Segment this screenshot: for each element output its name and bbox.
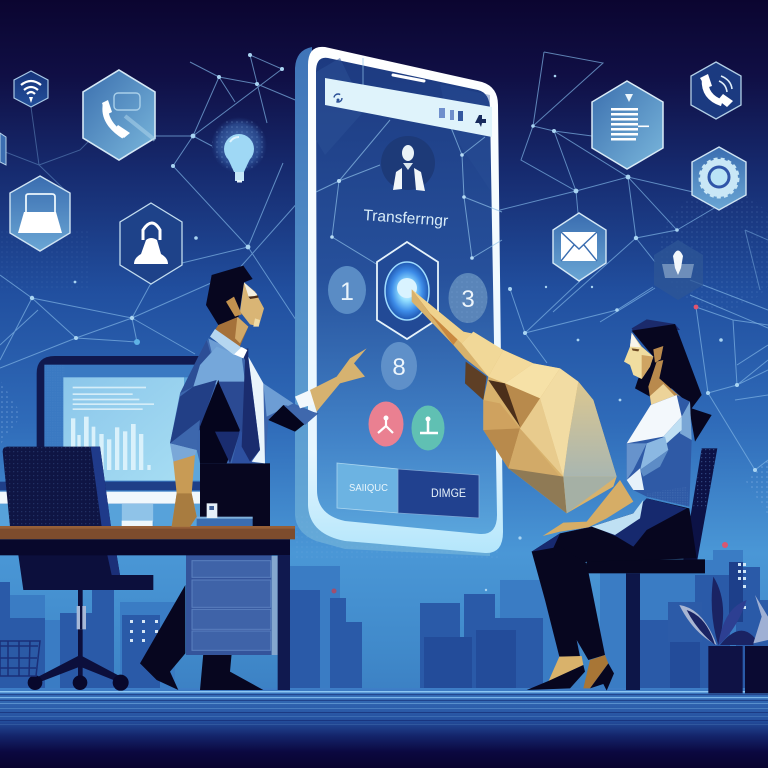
- dotted texture patches: [0, 190, 768, 515]
- bottom button bar: [337, 463, 479, 518]
- woman figure: [412, 289, 712, 691]
- desktop monitor: [0, 356, 201, 527]
- wastebasket: [0, 641, 40, 676]
- number button 8: 8: [392, 354, 406, 381]
- monitor bar chart: [71, 417, 151, 470]
- icon: edge tile: [0, 133, 6, 165]
- number button 1: [328, 266, 366, 314]
- woman lap and thigh: [532, 498, 697, 577]
- number button 8: [381, 342, 417, 390]
- office chair: [3, 447, 153, 691]
- number button 1: 1: [340, 278, 354, 306]
- icon: light bulb: [211, 117, 267, 182]
- icon: document hexagon: [592, 81, 663, 169]
- desk: [0, 526, 295, 690]
- green action button: [412, 406, 444, 450]
- man head and collar: [206, 266, 264, 358]
- status bar: [325, 78, 492, 137]
- man shirt: [170, 338, 317, 463]
- profile avatar: [381, 136, 435, 191]
- woman chair: [587, 448, 717, 690]
- icon: person hexagon: [654, 240, 703, 300]
- phone side edge: [295, 47, 490, 556]
- woman legs: [532, 547, 605, 660]
- woman feet and shoes: [527, 655, 614, 691]
- woman shirt: [627, 395, 692, 508]
- man left arm: [170, 443, 197, 527]
- city skyline: [0, 542, 768, 690]
- phone screen: [316, 58, 497, 534]
- big pointing hand: [412, 289, 617, 513]
- bottom button bar: DIMGE: [431, 486, 466, 500]
- woman neck and face: [624, 333, 680, 408]
- man right arm: [268, 348, 367, 432]
- icon: bag hexagon: [10, 176, 70, 251]
- woman forearm: [543, 480, 633, 536]
- right icons: [553, 62, 746, 300]
- speaker slot: [393, 75, 424, 81]
- screen title: Transferrngr: [363, 207, 449, 230]
- number button 3: 3: [461, 286, 475, 313]
- man trousers: [140, 463, 270, 690]
- phone mockup: [295, 47, 503, 559]
- potted plants: [679, 577, 768, 693]
- desk items: [197, 503, 253, 526]
- icon: mail hexagon: [553, 213, 606, 281]
- icon: phone hexagon: [691, 62, 741, 119]
- filing drawers: [186, 555, 278, 655]
- central hex button: [377, 242, 438, 339]
- icon: gear hexagon: [692, 147, 746, 210]
- left icons: [0, 70, 267, 284]
- number button 3: [448, 273, 488, 323]
- phone frame: [308, 47, 503, 553]
- screen network lines: [316, 58, 502, 265]
- man tie and shirt front: [240, 348, 265, 463]
- bottom button bar: SAIIQUC: [349, 482, 388, 494]
- network lines and nodes: [0, 52, 768, 591]
- floor: [0, 688, 768, 768]
- icon: phone call hexagon: [83, 70, 155, 160]
- monitor text lines: [73, 387, 154, 410]
- woman hair: [632, 319, 712, 442]
- man figure: [0, 266, 367, 690]
- icon: lock hexagon: [120, 203, 182, 284]
- pink action button: [368, 402, 404, 446]
- icon: wifi hexagon: [14, 71, 48, 107]
